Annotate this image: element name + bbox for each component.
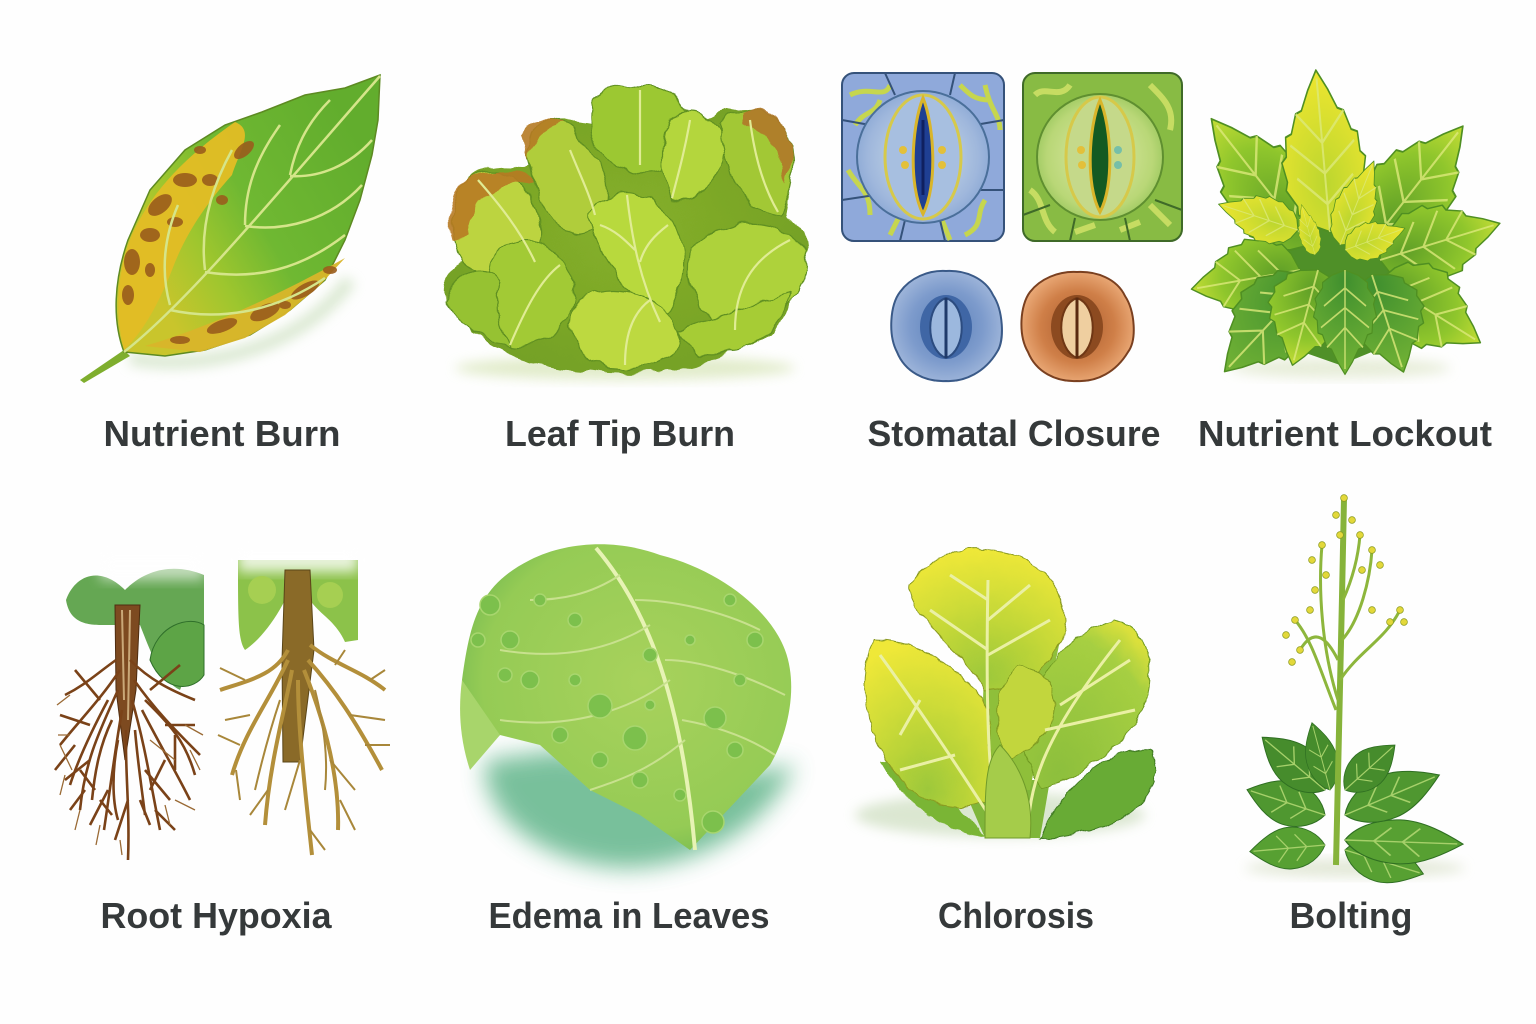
heading: Bolting: Bolting bbox=[1290, 895, 1412, 936]
panel: Bolting bbox=[1240, 495, 1465, 936]
heading: Leaf Tip Burn: Leaf Tip Burn bbox=[505, 413, 735, 454]
heading: Root Hypoxia: Root Hypoxia bbox=[100, 895, 332, 936]
icon: open green stoma bbox=[1023, 73, 1182, 241]
icon: open blue stoma bbox=[842, 73, 1004, 241]
panel: Edema in Leaves bbox=[460, 544, 795, 936]
panel: Root Hypoxia bbox=[55, 548, 390, 936]
panel: Nutrient Burn bbox=[80, 75, 380, 454]
heading: Edema in Leaves: Edema in Leaves bbox=[488, 895, 770, 936]
icon: lettuce head bbox=[444, 84, 807, 380]
panel: Stomatal Closure bbox=[842, 73, 1182, 454]
icon: yellowing seedling bbox=[855, 549, 1156, 838]
icon: flowering bolted plant bbox=[1240, 495, 1465, 894]
icon: leafy plant bbox=[1177, 67, 1511, 400]
heading: Nutrient Lockout: Nutrient Lockout bbox=[1198, 413, 1492, 454]
heading: Nutrient Burn: Nutrient Burn bbox=[104, 413, 340, 454]
icon: blistered leaf bbox=[460, 544, 795, 868]
icon: dark damaged roots bbox=[55, 552, 204, 860]
panel: Nutrient Lockout bbox=[1177, 67, 1511, 454]
icon: pale healthy roots bbox=[218, 548, 390, 855]
heading: Chlorosis: Chlorosis bbox=[938, 895, 1094, 936]
panel: Leaf Tip Burn bbox=[444, 84, 807, 454]
icon: burnt leaf bbox=[80, 75, 380, 383]
heading: Stomatal Closure: Stomatal Closure bbox=[868, 413, 1160, 454]
panel: Chlorosis bbox=[855, 549, 1156, 936]
icon: closed blue stoma bbox=[891, 271, 1002, 381]
icon: closed orange stoma bbox=[1021, 272, 1134, 381]
